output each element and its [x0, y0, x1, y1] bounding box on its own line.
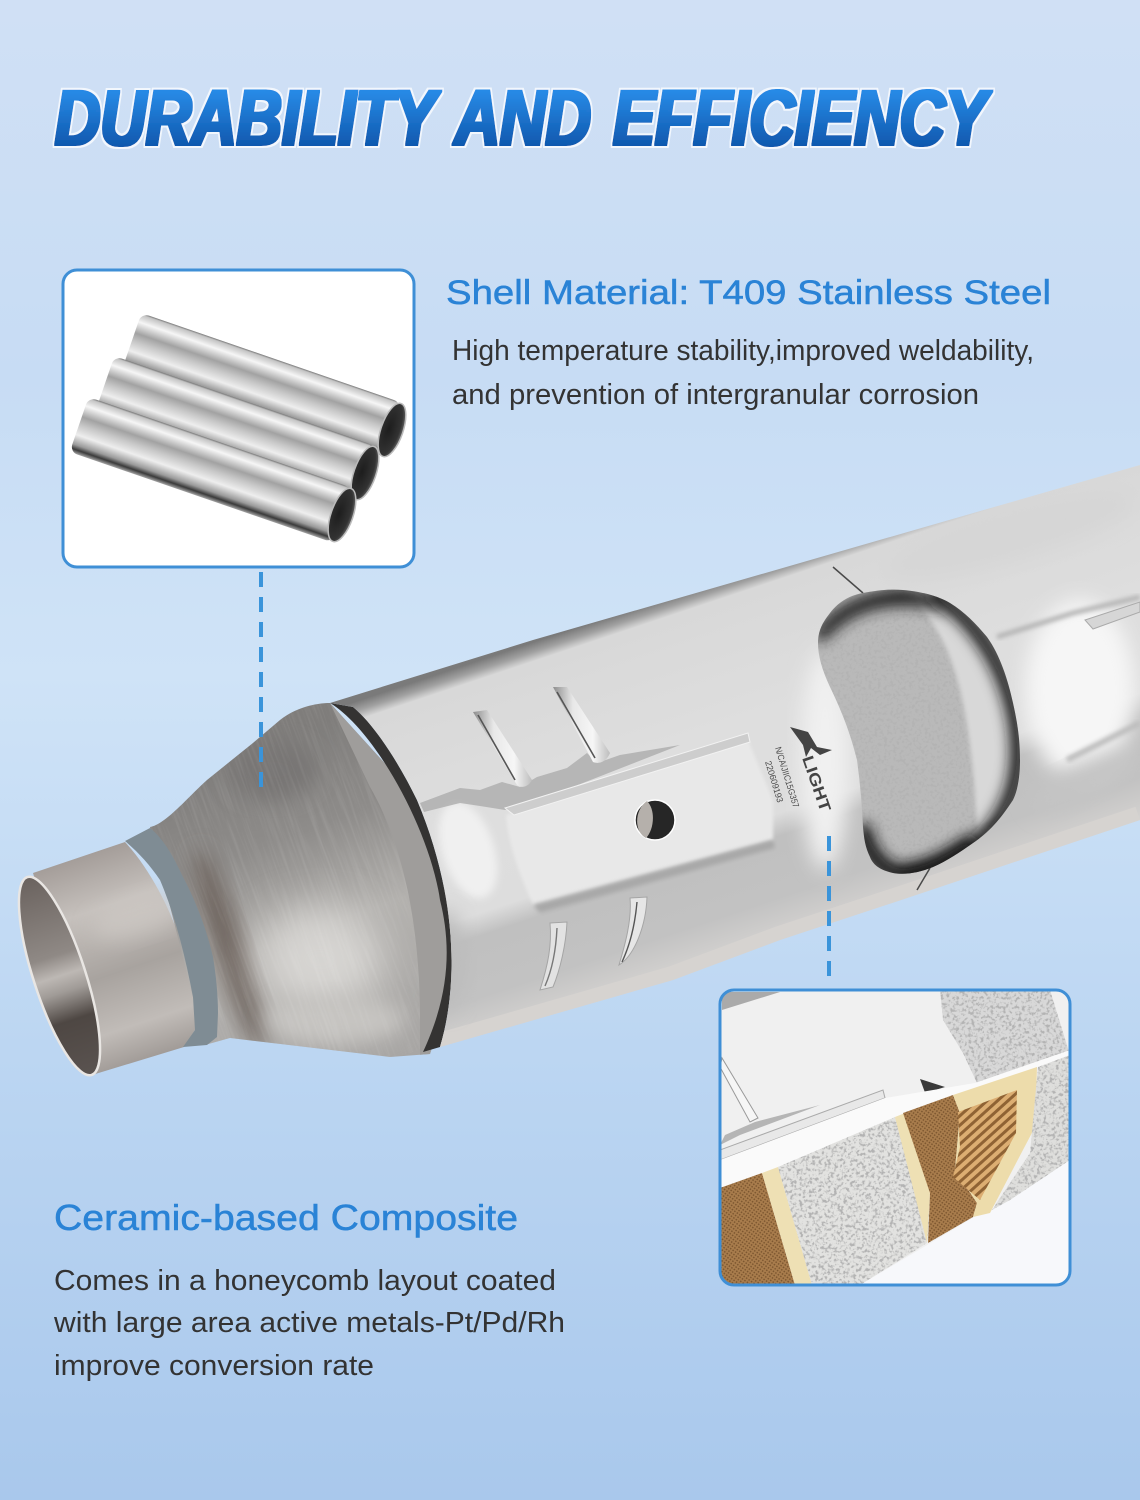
left cream	[762, 1167, 812, 1285]
converter product illustration	[3, 465, 1140, 1126]
shell highlights	[440, 820, 1140, 1047]
right speckled mat	[992, 1055, 1070, 1210]
dashed connector: ceramic	[827, 836, 831, 986]
lower rib right	[619, 897, 647, 965]
middle cream	[895, 1113, 930, 1243]
serial text	[763, 746, 801, 809]
raised pad	[506, 740, 773, 905]
rib: right	[553, 687, 610, 763]
serial text: N/CA/JIIC15G357	[773, 746, 801, 809]
ceramic description: with large area active metals-Pt/Pd/Rh	[53, 1307, 565, 1339]
icon: tube front	[70, 397, 362, 546]
icon: tube middle	[96, 356, 385, 504]
left honeycomb	[720, 1173, 795, 1285]
shiny wave above pad	[420, 745, 680, 812]
panel: stainless tubes	[63, 270, 414, 567]
serial text: 220609193	[763, 760, 785, 804]
heading: ceramic: Ceramic-based Composite	[54, 1197, 518, 1238]
brand logo: LIGHT	[798, 754, 833, 814]
dark gap behind shell	[330, 703, 452, 1052]
lower shell	[860, 1160, 1070, 1285]
shell description	[452, 335, 1034, 411]
vent hole	[635, 800, 675, 840]
inset logo	[920, 1079, 945, 1092]
shell description: High temperature stability,improved weldability,	[452, 335, 1034, 367]
long top rib	[505, 733, 750, 815]
speckled substrate top	[940, 990, 1070, 1083]
strap seams	[833, 567, 930, 890]
inlet pipe	[3, 842, 195, 1083]
icon: tube back	[123, 313, 412, 461]
cone reducer	[150, 703, 452, 1057]
rib: left	[473, 710, 532, 787]
lower rib left	[540, 922, 567, 990]
shell rib	[720, 1090, 885, 1160]
dashed connector: shell	[259, 572, 263, 790]
catalytic shell body	[330, 465, 1140, 1047]
shell description: and prevention of intergranular corrosion	[452, 379, 979, 411]
ceramic description	[53, 1265, 565, 1382]
brand logo	[790, 727, 833, 814]
panel: catalyst cutaway	[720, 990, 1070, 1285]
cream V	[953, 1067, 1037, 1217]
striped cells	[953, 1090, 1017, 1200]
collar band	[125, 828, 218, 1047]
cone rim band	[330, 703, 446, 1055]
left speckled mat	[778, 1117, 930, 1285]
ceramic description: Comes in a honeycomb layout coated	[54, 1265, 556, 1297]
window showing substrate	[818, 590, 1020, 874]
center honeycomb	[903, 1095, 977, 1243]
cutaway shell	[720, 990, 1070, 1285]
heading: shell material: Shell Material: T409 Stainless Steel	[446, 274, 1051, 312]
ceramic description: improve conversion rate	[54, 1350, 374, 1382]
pad lower shadow	[533, 840, 775, 913]
white shell band	[720, 1050, 1070, 1190]
